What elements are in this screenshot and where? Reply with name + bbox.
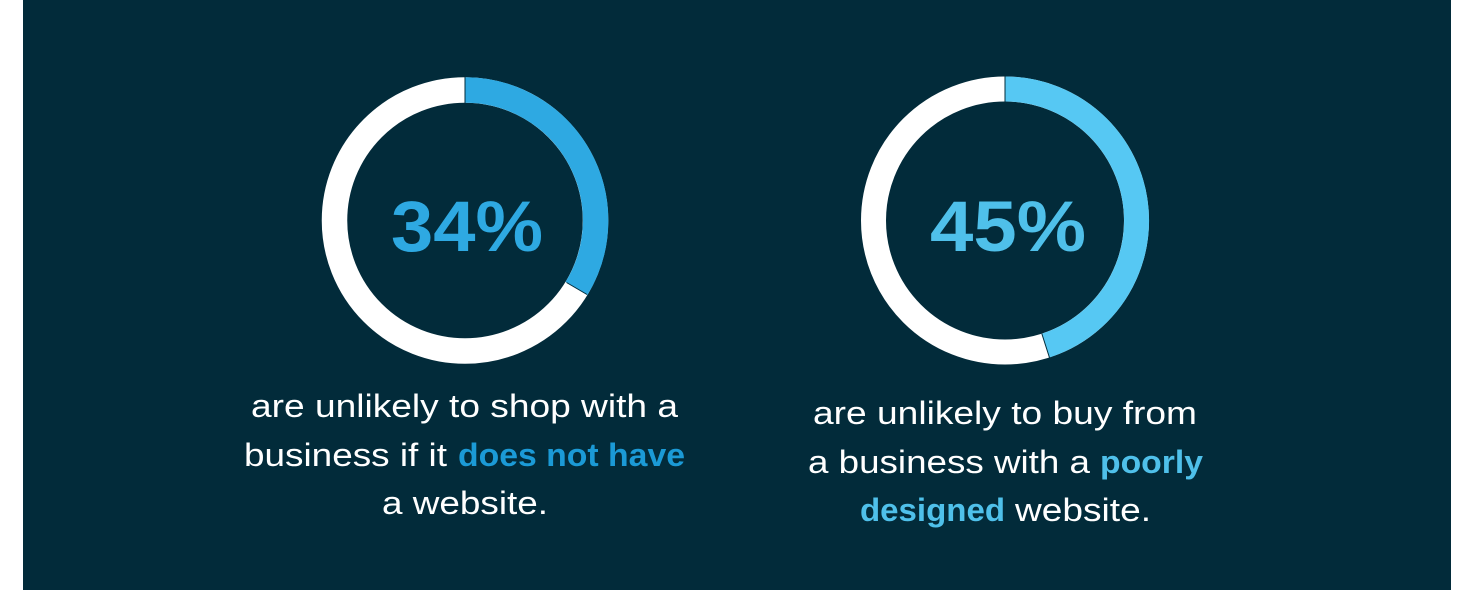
caption: shop with a business: business if it bbox=[244, 437, 447, 473]
caption: buy from a business: website. bbox=[1014, 492, 1151, 528]
donut chart: 34% bbox=[334, 77, 596, 351]
caption: shop with a business bbox=[244, 388, 685, 521]
caption: buy from a business: designed bbox=[860, 492, 1005, 528]
caption: shop with a business: does not have bbox=[458, 437, 685, 473]
caption: shop with a business: a website. bbox=[382, 485, 548, 521]
panel: 34% statistic bbox=[244, 77, 685, 521]
donut chart: 45% bbox=[874, 76, 1137, 358]
caption: shop with a business: are unlikely to shop with a bbox=[251, 388, 678, 424]
caption: buy from a business: poorly bbox=[1100, 444, 1203, 480]
caption: buy from a business: a business with a bbox=[808, 444, 1090, 480]
number: 34%: 34% bbox=[391, 188, 543, 267]
caption: buy from a business bbox=[808, 395, 1203, 528]
panel: 45% statistic bbox=[808, 76, 1203, 528]
number: 45%: 45% bbox=[930, 188, 1086, 267]
caption: buy from a business: are unlikely to buy from bbox=[813, 395, 1197, 431]
